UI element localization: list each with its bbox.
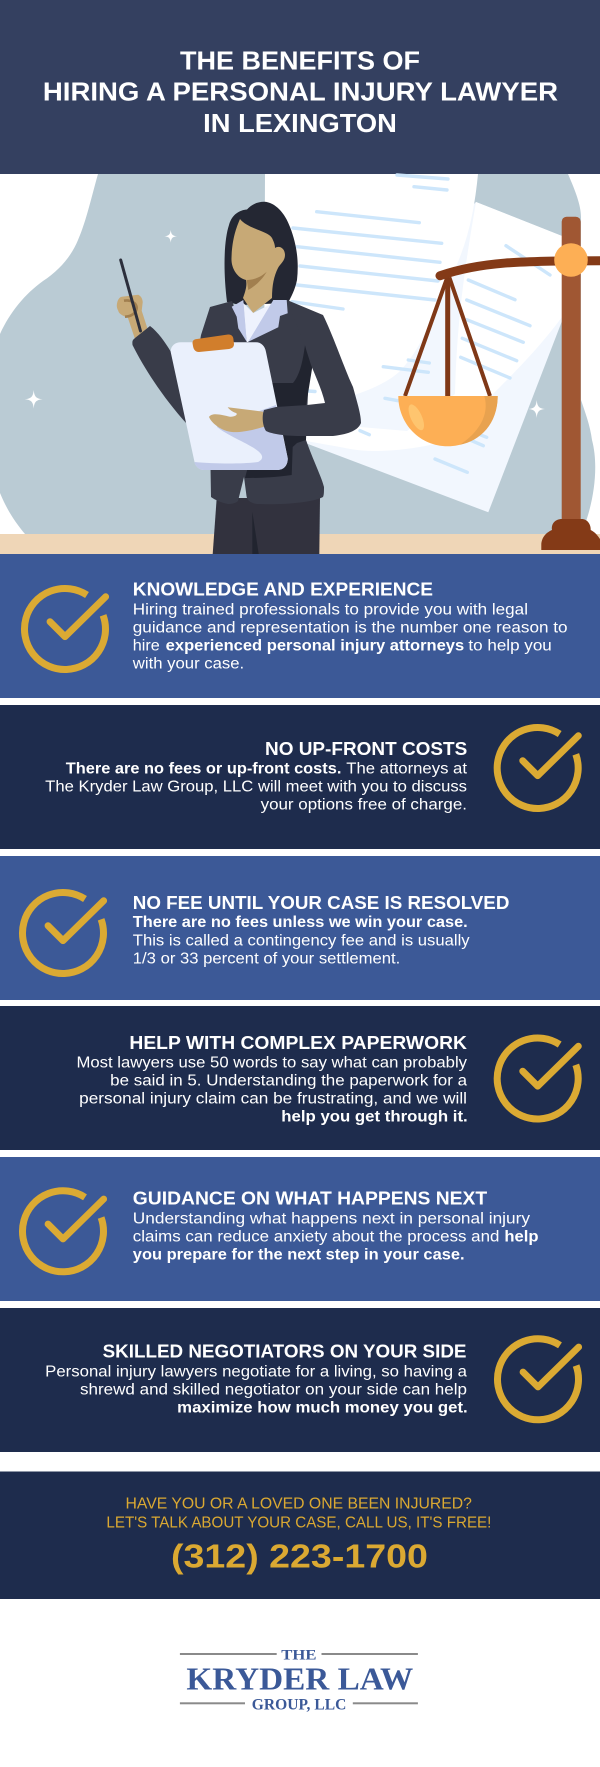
- body text: This is called a contingency fee and is usually: [133, 932, 470, 949]
- icon: check circle: [22, 892, 104, 973]
- scales of justice: [398, 217, 600, 550]
- panel: guidance on what happens next: [0, 1157, 600, 1301]
- title: HIRING A PERSONAL INJURY LAWYER: [43, 77, 558, 107]
- inner dark blouse: [245, 345, 312, 478]
- title: THE BENEFITS OF: [180, 46, 420, 76]
- hand on clipboard: [209, 407, 264, 432]
- logo: The Kryder Law Group, LLC: KRYDER LAW: [186, 1660, 413, 1696]
- scale base: [541, 519, 600, 550]
- panel: no up-front costs: [0, 705, 600, 849]
- body text: you prepare for the next step in your case.: [133, 1246, 465, 1263]
- pen: [121, 260, 140, 331]
- icon: check circle: [497, 727, 578, 808]
- body text: Understanding what happens next in personal injury: [133, 1210, 530, 1227]
- body text: help you get through it.: [281, 1108, 468, 1125]
- body text: help: [504, 1228, 538, 1245]
- title: [43, 46, 558, 138]
- call to action text: LET'S TALK ABOUT YOUR CASE, CALL US, IT'S FREE!: [106, 1514, 491, 1531]
- body text: [133, 914, 470, 967]
- heading: NO FEE UNTIL YOUR CASE IS RESOLVED: [133, 892, 509, 913]
- shirt: [243, 303, 273, 342]
- panel: knowledge and experience: [0, 554, 600, 698]
- trousers: [213, 498, 320, 554]
- hair: [225, 202, 298, 305]
- clipboard clip: [192, 334, 234, 352]
- body text: Personal injury lawyers negotiate for a living, so having a: [45, 1363, 467, 1380]
- icon: check circle: [497, 1339, 579, 1420]
- body text: be said in 5. Understanding the paperwork for a: [110, 1072, 467, 1089]
- clipboard: [171, 342, 288, 470]
- floor: [0, 534, 600, 554]
- body text: guidance and representation is the number one reason to: [133, 619, 568, 636]
- scale strings: [405, 277, 490, 396]
- icon: check circle: [22, 1191, 104, 1272]
- scale beam: [440, 261, 600, 276]
- neck and face: [231, 219, 285, 313]
- body text: Most lawyers use 50 words to say what can probably: [76, 1054, 467, 1071]
- call to action text: HAVE YOU OR A LOVED ONE BEEN INJURED?: [126, 1495, 472, 1512]
- body text: with your case.: [132, 655, 244, 672]
- left arm: [132, 326, 187, 424]
- title: IN LEXINGTON: [203, 108, 397, 138]
- collar: [232, 300, 288, 342]
- body text: [45, 760, 468, 813]
- panel: help with complex paperwork: [0, 1006, 600, 1150]
- illustration: lawyer with clipboard and scales of justice: [0, 174, 600, 554]
- icon: check circle: [24, 588, 106, 669]
- scale post: [562, 217, 581, 527]
- heading: GUIDANCE ON WHAT HAPPENS NEXT: [133, 1188, 488, 1209]
- right sleeve: [263, 300, 361, 436]
- panel: no fee until your case is resolved: [0, 856, 600, 1000]
- body text: claims can reduce anxiety about the process and: [133, 1228, 499, 1245]
- body text: experienced personal injury attorneys: [166, 637, 464, 654]
- body text: [133, 1210, 539, 1263]
- logo: The Kryder Law Group, LLC: GROUP, LLC: [252, 1696, 346, 1713]
- heading: NO UP-FRONT COSTS: [265, 738, 467, 759]
- body text: There are no fees unless we win your case.: [133, 914, 468, 931]
- heading: KNOWLEDGE AND EXPERIENCE: [133, 579, 433, 600]
- background blob: [0, 174, 595, 534]
- logo: The Kryder Law Group, LLC: THE: [281, 1647, 316, 1663]
- call to action text: [106, 1495, 491, 1531]
- body text: to help you: [468, 637, 552, 654]
- body text: [132, 601, 568, 672]
- panel: skilled negotiators on your side: [0, 1308, 600, 1452]
- body text: There are no fees or up-front costs.: [66, 760, 341, 777]
- phone number: (312) 223-1700: [171, 1537, 428, 1574]
- body text: Hiring trained professionals to provide you with legal: [133, 601, 528, 618]
- raised hand: [117, 295, 147, 339]
- document sheets: [264, 174, 562, 512]
- body text: [45, 1363, 468, 1416]
- body text: maximize how much money you get.: [177, 1399, 468, 1416]
- body text: The attorneys at: [346, 760, 468, 777]
- call to action panel: [0, 1472, 600, 1599]
- logo: The Kryder Law Group, LLC: [180, 1647, 418, 1713]
- header banner: [0, 0, 600, 174]
- body text: personal injury claim can be frustrating, and we will: [79, 1090, 467, 1107]
- body text: 1/3 or 33 percent of your settlement.: [133, 950, 400, 967]
- body text: your options free of charge.: [261, 796, 467, 813]
- body text: shrewd and skilled negotiator on your side can help: [80, 1381, 467, 1398]
- heading: SKILLED NEGOTIATORS ON YOUR SIDE: [103, 1341, 466, 1362]
- body text: hire: [133, 637, 160, 654]
- woman lawyer: [117, 202, 361, 554]
- heading: HELP WITH COMPLEX PAPERWORK: [129, 1032, 468, 1053]
- body text: [76, 1054, 468, 1125]
- ring: [124, 300, 137, 317]
- jacket: [190, 300, 324, 504]
- body text: The Kryder Law Group, LLC will meet with you to discuss: [45, 778, 467, 795]
- icon: check circle: [497, 1038, 578, 1119]
- scale pan: [398, 396, 498, 446]
- sparkles: [25, 230, 545, 418]
- scale pivot: [554, 243, 588, 277]
